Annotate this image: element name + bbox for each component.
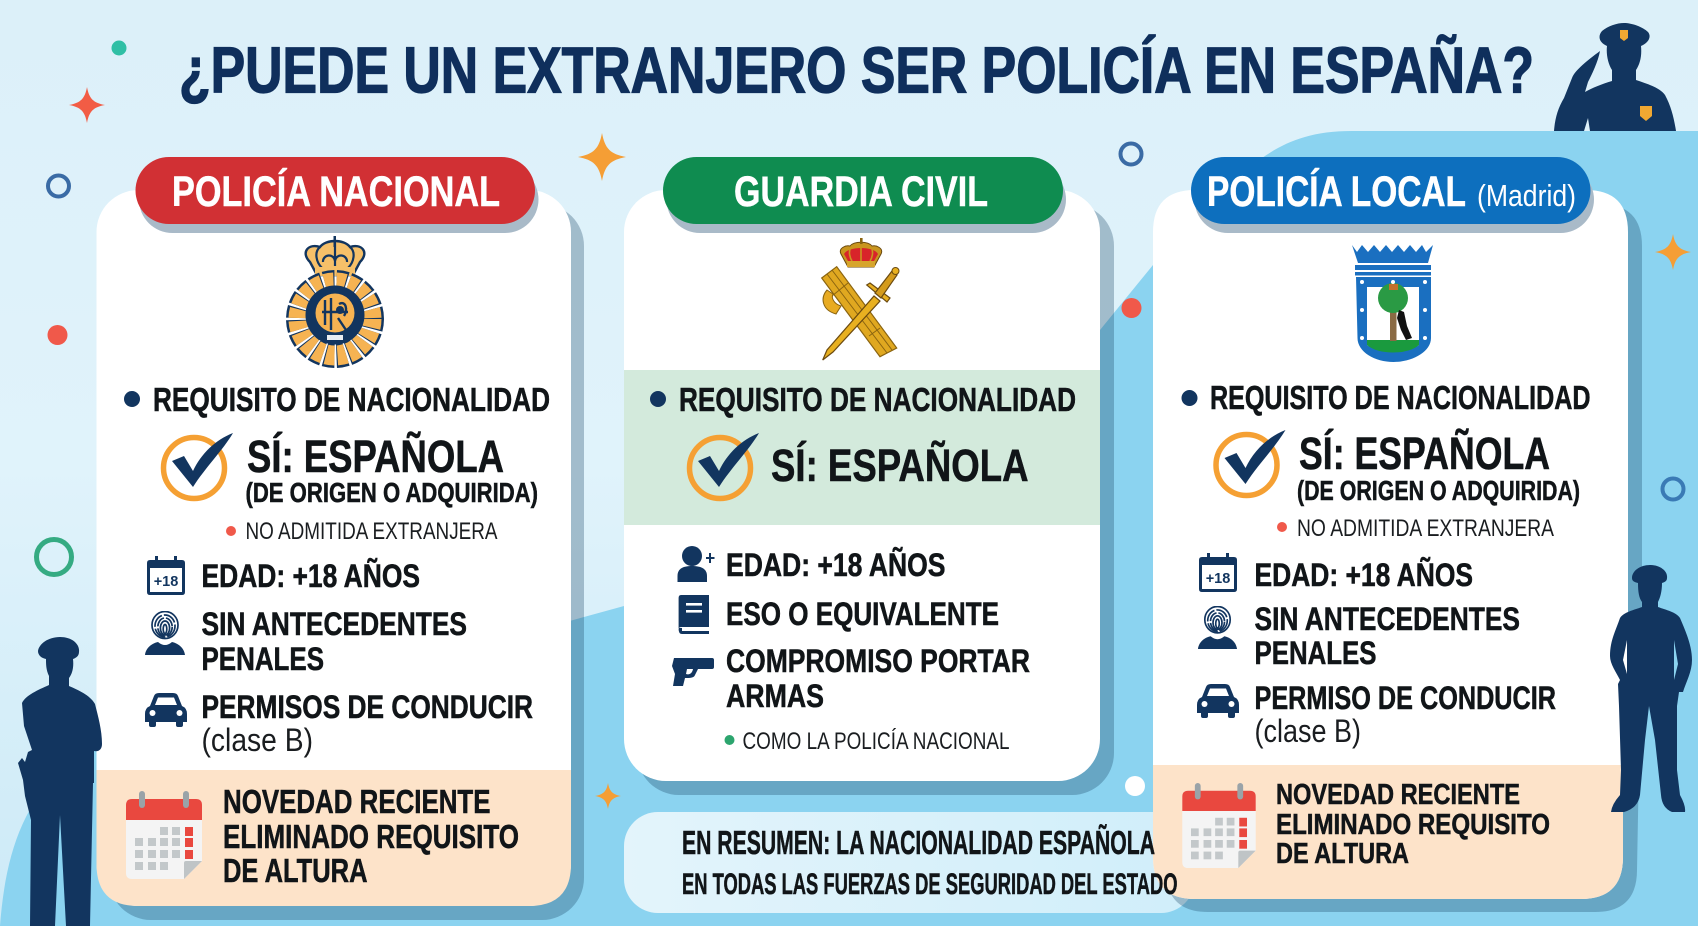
- permiso text: (clase B): [1254, 713, 1361, 749]
- antecedentes text: [202, 606, 467, 677]
- pill header: [663, 157, 1066, 233]
- note: no admitida: NO ADMITIDA EXTRANJERA: [246, 518, 498, 545]
- decorative star: red: [69, 87, 105, 123]
- panel: guardia civil: [624, 157, 1114, 795]
- summary text: EN TODAS LAS FUERZAS DE SEGURIDAD DEL ESTADO: [682, 868, 1178, 901]
- pill header: [136, 157, 538, 233]
- antecedentes text: SIN ANTECEDENTES: [202, 606, 467, 642]
- pill header: (Madrid): [1477, 178, 1576, 213]
- decorative ring: green: [36, 540, 72, 574]
- panel: policía nacional: [96, 157, 584, 920]
- nationality answer: SÍ: ESPAÑOLA: [247, 431, 504, 482]
- icon: madrid coat of arms: [1352, 245, 1433, 362]
- decorative dot: teal: [112, 40, 126, 56]
- compromiso text: COMPROMISO PORTAR: [726, 643, 1030, 679]
- decorative dot: white: [1125, 776, 1145, 796]
- decorative dot: red left: [48, 325, 68, 345]
- antecedentes text: PENALES: [202, 641, 324, 677]
- summary text: EN RESUMEN: LA NACIONALIDAD ESPAÑOLA: [682, 824, 1155, 861]
- novelty text: ELIMINADO REQUISITO: [223, 818, 519, 855]
- compromiso text: [726, 643, 1030, 714]
- novelty text: NOVEDAD RECIENTE: [1276, 779, 1520, 811]
- check icon: [164, 433, 233, 498]
- card shadow: [1166, 204, 1642, 912]
- chest badge: [1640, 106, 1652, 121]
- icon: calendar +18: +18: [154, 574, 178, 590]
- icon: policía nacional emblem: [298, 236, 372, 356]
- icon: fingerprint: [1198, 606, 1237, 649]
- antecedentes text: [1254, 601, 1520, 671]
- novelty text: ELIMINADO REQUISITO: [1276, 809, 1550, 841]
- hat badge: [1620, 30, 1628, 41]
- requirement heading: REQUISITO DE NACIONALIDAD: [679, 381, 1076, 418]
- icon: fingerprint: [145, 612, 185, 655]
- peach novelty band: [1153, 765, 1623, 899]
- icon: car: [145, 693, 187, 727]
- nationality answer: SÍ: ESPAÑOLA: [1299, 428, 1550, 479]
- icon: calendar +18: [147, 556, 185, 595]
- pill header: POLICÍA LOCAL: [1207, 168, 1466, 216]
- requirement heading: REQUISITO DE NACIONALIDAD: [153, 381, 550, 418]
- saluting officer silhouette: [1554, 23, 1676, 131]
- card shadow: [637, 204, 1114, 795]
- antecedentes text: PENALES: [1254, 635, 1376, 671]
- icon: peeled calendar: [126, 791, 202, 879]
- card shadow: [109, 204, 584, 920]
- peach novelty band: [96, 770, 571, 906]
- escolarización text: ESO O EQUIVALENTE: [726, 596, 999, 632]
- novelty text: DE ALTURA: [223, 852, 368, 889]
- nationality answer: [246, 431, 538, 508]
- pill header: POLICÍA NACIONAL: [172, 168, 500, 216]
- check icon: [1216, 430, 1286, 496]
- card body: [1153, 190, 1628, 899]
- novelty text: DE ALTURA: [1276, 838, 1409, 870]
- decorative star: orange right: [1655, 234, 1691, 270]
- icon: book: [679, 595, 709, 634]
- summary text: [682, 824, 1178, 901]
- nationality answer: [1297, 428, 1580, 506]
- permiso text: [1254, 680, 1556, 749]
- edad text: EDAD: +18 AÑOS: [202, 558, 420, 594]
- icon: pistol: [672, 658, 714, 686]
- icon: peeled calendar: [1182, 783, 1256, 868]
- permisos text: (clase B): [202, 722, 313, 758]
- note: como la policía nacional: COMO LA POLICÍA NACIONAL: [742, 728, 1010, 755]
- icon: calendar +18: +18: [1206, 571, 1230, 587]
- check icon: [690, 433, 759, 498]
- note: no admitida: NO ADMITIDA EXTRANJERA: [1297, 515, 1555, 542]
- nationality answer: (DE ORIGEN O ADQUIRIDA): [1297, 475, 1580, 506]
- permisos text: [202, 689, 533, 758]
- icon: car: [1197, 684, 1239, 718]
- antecedentes text: SIN ANTECEDENTES: [1254, 601, 1520, 637]
- panel: policía local: [1153, 157, 1642, 912]
- nationality answer: (DE ORIGEN O ADQUIRIDA): [246, 477, 538, 508]
- edad text: EDAD: +18 AÑOS: [726, 547, 946, 583]
- decorative ring: blue right: [1662, 478, 1684, 500]
- summary box background: [624, 812, 1195, 913]
- edad text: EDAD: +18 AÑOS: [1254, 557, 1473, 593]
- novelty text: [223, 783, 519, 889]
- right officer silhouette: [1610, 565, 1692, 812]
- novelty text: [1276, 779, 1550, 870]
- decorative ring: blue left: [48, 176, 69, 196]
- permiso text: PERMISO DE CONDUCIR: [1254, 680, 1556, 716]
- decorative star: small orange: [595, 783, 621, 809]
- pill header: GUARDIA CIVIL: [734, 168, 988, 216]
- novelty text: NOVEDAD RECIENTE: [223, 783, 490, 820]
- decorative star: orange: [578, 133, 626, 181]
- permisos text: PERMISOS DE CONDUCIR: [202, 689, 533, 725]
- requirement heading: REQUISITO DE NACIONALIDAD: [1210, 379, 1590, 416]
- nationality answer: SÍ: ESPAÑOLA: [771, 440, 1028, 491]
- icon: calendar +18: [1199, 553, 1237, 592]
- green nationality band: [624, 370, 1100, 525]
- pill header: [1191, 157, 1594, 233]
- compromiso text: ARMAS: [726, 678, 824, 714]
- decorative dot: red centre: [1122, 298, 1142, 318]
- left officer silhouette: [18, 637, 102, 926]
- icon: person plus: [678, 546, 714, 582]
- card body: [624, 190, 1100, 781]
- card body: [96, 190, 571, 906]
- icon: guardia civil emblem: [822, 238, 899, 360]
- decorative ring: blue centre: [1120, 144, 1142, 164]
